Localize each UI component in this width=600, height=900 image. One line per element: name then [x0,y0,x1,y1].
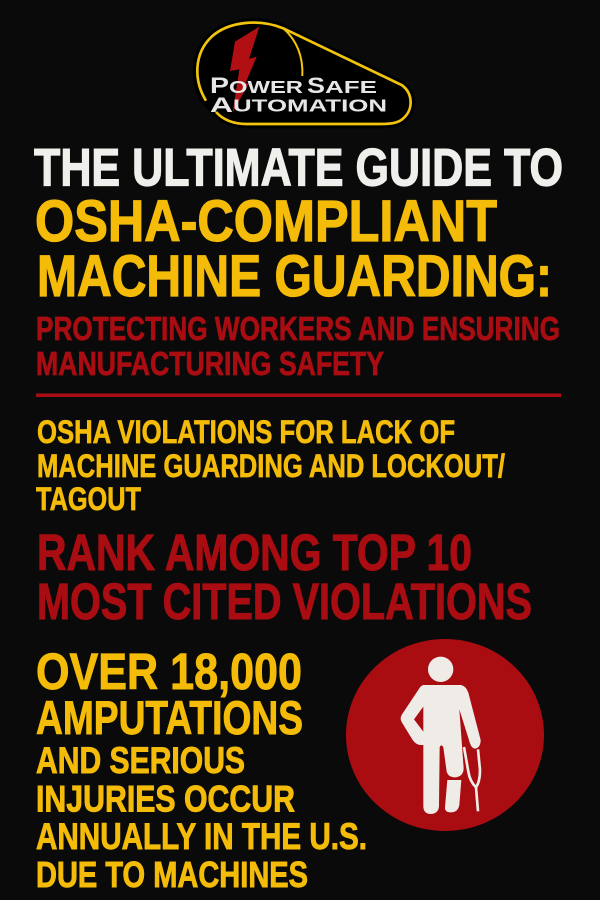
logo wordmark: P [210,73,229,98]
logo wordmark: AFE [325,77,377,97]
violations text [36,414,505,517]
amputation statistic: AMPUTATIONS [36,691,303,744]
amputation statistic: ANNUALLY IN THE U.S. [36,816,367,857]
violations text: OSHA VIOLATIONS FOR LACK OF [37,414,455,450]
icon: injured worker with crutch [346,639,544,831]
logo wordmark: OWER [229,77,303,97]
logo wordmark [210,73,387,117]
amputation statistic: AND SERIOUS [36,740,245,781]
logo wordmark: A [210,94,233,117]
title line 2: OSHA-COMPLIANT [35,189,497,254]
logo: PowerSafe Automation [197,23,411,124]
amputation statistic: DUE TO MACHINES [36,854,308,895]
violations text: TAGOUT [36,481,141,517]
ranking statement: RANK AMONG TOP 10 [37,524,472,581]
subtitle: MANUFACTURING SAFETY [36,345,384,382]
amputation statistic [36,643,367,895]
amputation statistic: OVER 18,000 [36,643,302,700]
logo wordmark: S [307,73,325,98]
amputation statistic: INJURIES OCCUR [36,778,295,820]
ranking statement [37,524,532,630]
subtitle [36,310,560,382]
logo wordmark: UTOMATION [233,96,387,116]
